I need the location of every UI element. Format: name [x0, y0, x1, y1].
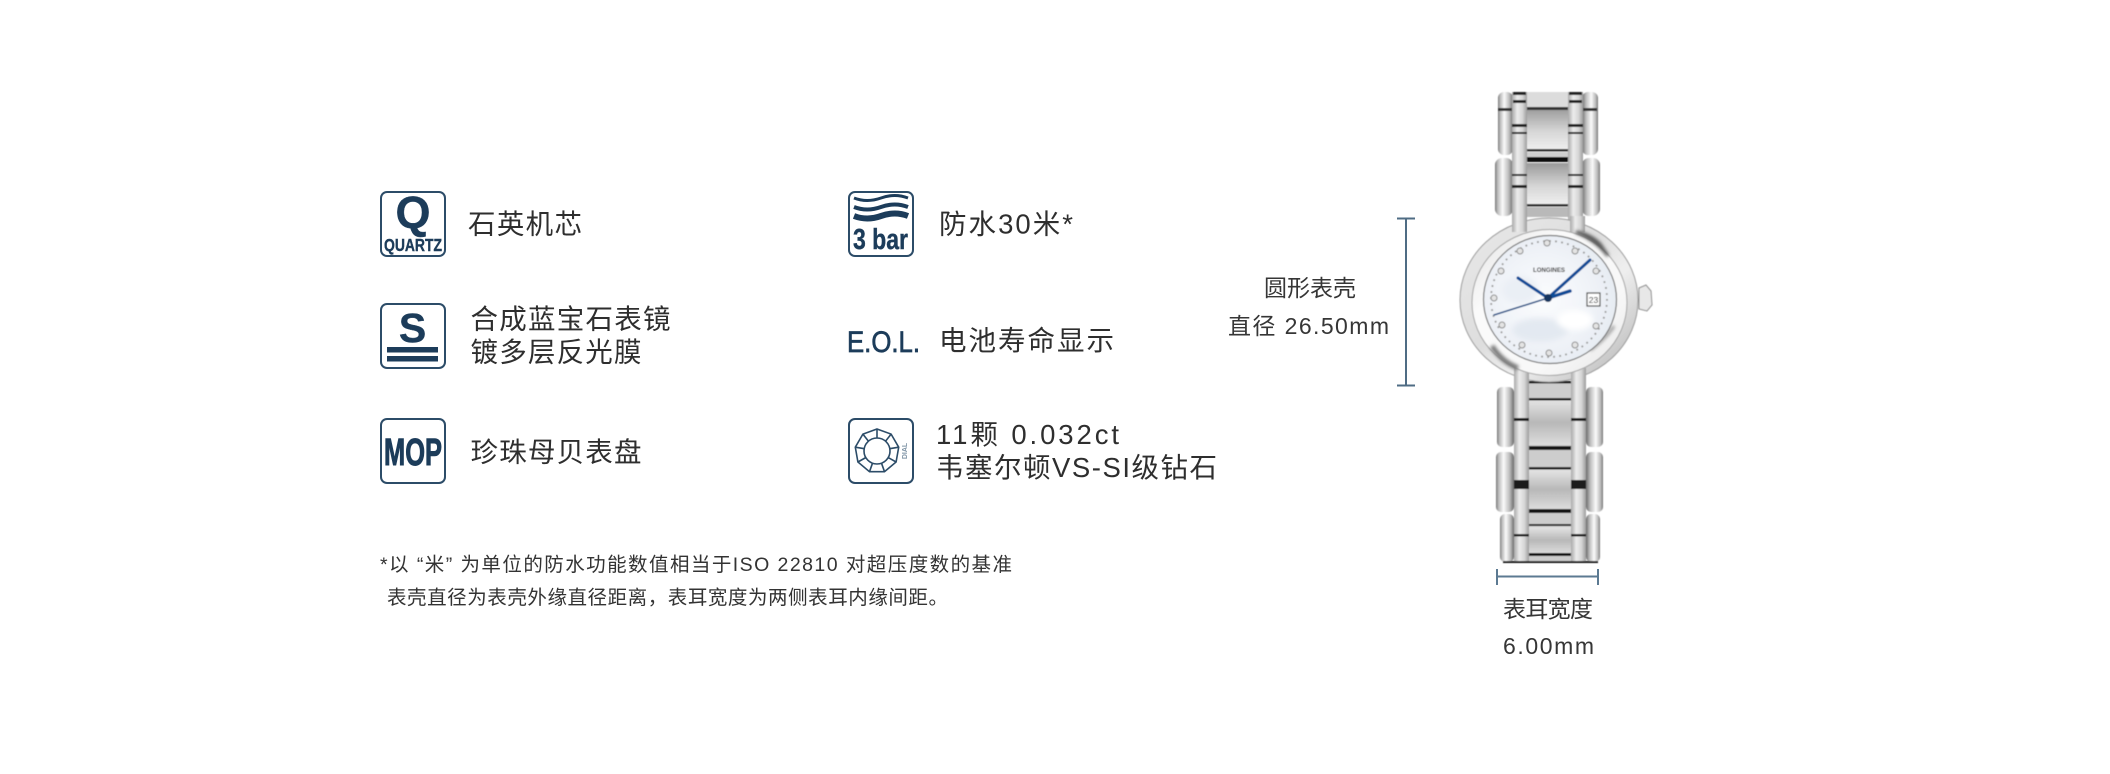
watch: upper bracelet — [1495, 92, 1600, 224]
label: diamonds — [936, 419, 1217, 483]
icon: diamond — [849, 419, 913, 483]
watch: crown — [1639, 285, 1652, 311]
watch: lower bracelet — [1496, 376, 1603, 563]
feature: quartz movement — [381, 187, 582, 256]
icon: MOP: MOP — [384, 432, 442, 474]
dimension: case diameter — [1228, 218, 1415, 386]
dimension line: vertical — [1397, 218, 1415, 386]
footnote — [380, 554, 1012, 609]
label: sapphire crystal: 镀多层反光膜 — [470, 336, 642, 368]
feature: water resistance — [849, 192, 1073, 256]
label: lug width value: 6.00mm — [1503, 633, 1594, 659]
diamonds — [1491, 240, 1599, 356]
hands — [1494, 260, 1590, 315]
feature: diamonds — [849, 419, 1217, 483]
label: diamonds: 11颗 0.032ct — [936, 419, 1119, 450]
icon: sapphire S: S — [399, 305, 426, 351]
label: mother of pearl dial: 珍珠母贝表盘 — [470, 436, 642, 468]
feature: sapphire crystal — [381, 304, 670, 368]
feature: end of life indicator — [847, 325, 1114, 359]
label: quartz movement: 石英机芯 — [468, 208, 582, 240]
label: water resistance: 防水30米* — [939, 208, 1073, 240]
label: lug width: 表耳宽度 — [1503, 596, 1593, 622]
watch — [1460, 92, 1652, 563]
footnote: *以 “米” 为单位的防水功能数值相当于ISO 22810 对超压度数的基准 — [380, 554, 1012, 576]
watch: dial — [1484, 236, 1616, 364]
label: end of life indicator: 电池寿命显示 — [939, 325, 1114, 356]
minute track — [1491, 241, 1607, 357]
label: sapphire crystal: 合成蓝宝石表镜 — [470, 304, 670, 334]
label: diamonds: 韦塞尔顿VS-SI级钻石 — [936, 452, 1217, 483]
dimension: lug width — [1497, 569, 1598, 659]
footnote: 表壳直径为表壳外缘直径距离，表耳宽度为两侧表耳内缘间距。 — [387, 587, 948, 609]
icon: sapphire S — [381, 304, 445, 368]
case highlights — [1576, 232, 1608, 256]
icon: 3 bar waves — [849, 192, 913, 256]
date window: 23 — [1589, 295, 1598, 305]
icon: quartz: Q — [395, 187, 431, 238]
feature: mother of pearl dial — [381, 419, 642, 483]
icon: quartz: QUARTZ — [384, 235, 442, 255]
icon: MOP — [381, 419, 445, 483]
brand: LONGINES — [1533, 267, 1566, 274]
watch: case — [1460, 216, 1652, 382]
label: sapphire crystal — [470, 304, 670, 368]
icon: diamond: DIAL — [902, 442, 909, 459]
icon: E.O.L.: E.O.L. — [847, 326, 920, 359]
icon: 3 bar waves: 3 bar — [853, 224, 908, 256]
label: diameter value: 直径 26.50mm — [1228, 313, 1389, 339]
icon: quartz — [381, 187, 445, 256]
label: round case: 圆形表壳 — [1264, 275, 1356, 301]
dimension line: horizontal — [1497, 569, 1598, 585]
